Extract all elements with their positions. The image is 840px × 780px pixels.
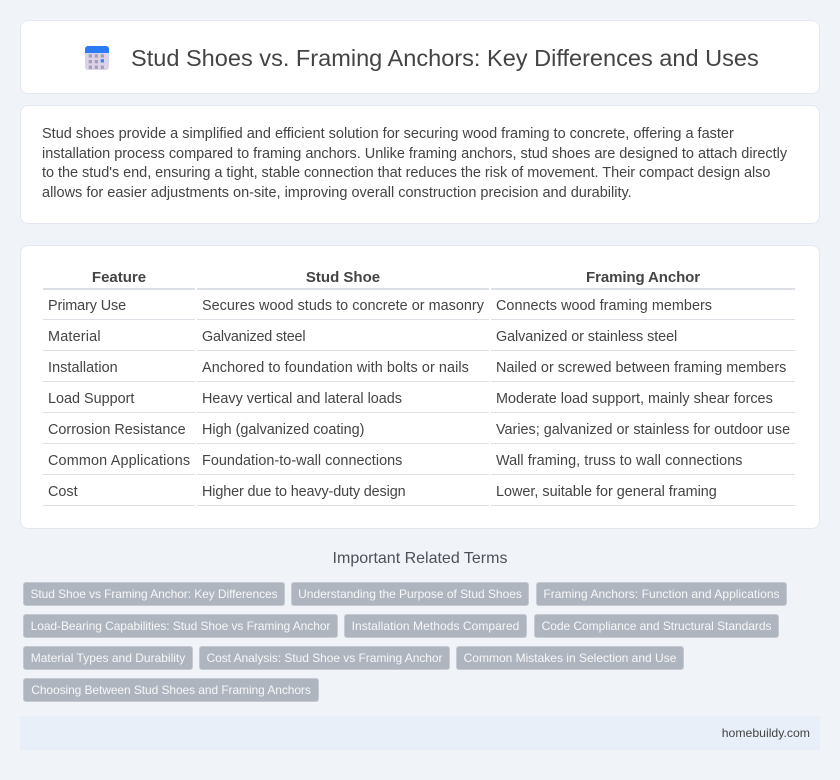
header panel (20, 20, 820, 94)
table header: Feature (92, 269, 146, 286)
title: Stud Shoes vs. Framing Anchors: Key Differences and Uses (131, 45, 759, 71)
row: primary use: Connects wood framing members (496, 298, 712, 314)
row: installation: Anchored to foundation with bolts or nails (202, 360, 469, 376)
row: material (48, 329, 677, 345)
text: summary: installation process compared to framing anchors. Unlike framing anchors, stud shoes are designed to attach directly (42, 146, 787, 162)
tag list: Cost Analysis: Stud Shoe vs Framing Anchor (206, 651, 442, 665)
row: installation: Nailed or screwed between framing members (496, 360, 786, 376)
row: load support (48, 391, 773, 407)
row: corrosion resistance: Varies; galvanized or stainless for outdoor use (496, 422, 790, 438)
row: cost: Cost (48, 484, 78, 500)
row: load support: Load Support (48, 391, 134, 407)
row: common applications: Wall framing, truss to wall connections (496, 453, 743, 469)
table header (92, 269, 700, 286)
panel: summary paragraph (20, 105, 820, 224)
row: common applications: Common Applications (48, 453, 190, 469)
row: primary use: Primary Use (48, 298, 126, 314)
tag list: Load-Bearing Capabilities: Stud Shoe vs Framing Anchor (31, 619, 330, 633)
row: corrosion resistance (48, 422, 790, 438)
row: primary use (48, 298, 712, 314)
tag list: Material Types and Durability (31, 651, 185, 665)
text: summary: allows for easier adjustments on-site, improving overall construction precision and durability. (42, 185, 632, 201)
row: primary use: Secures wood studs to concrete or masonry (202, 298, 484, 314)
tag list: Choosing Between Stud Shoes and Framing Anchors (31, 683, 311, 697)
footer text: homebuildy.com (722, 726, 810, 740)
row: cost: Higher due to heavy-duty design (202, 484, 405, 500)
heading: related terms: Important Related Terms (333, 550, 507, 567)
panel: comparison table (20, 245, 820, 529)
icon: calendar (85, 46, 109, 70)
text: summary: to the stud's end, ensuring a tight, stable connection that reduces the risk of movement. Their compact design also (42, 165, 770, 181)
row: common applications: Foundation-to-wall connections (202, 453, 402, 469)
text: summary (42, 126, 788, 201)
tag list: Code Compliance and Structural Standards (542, 619, 771, 633)
tag list: Understanding the Purpose of Stud Shoes (298, 587, 522, 601)
row: material: Galvanized or stainless steel (496, 329, 677, 345)
row: material: Galvanized steel (202, 329, 305, 345)
row: load support: Heavy vertical and lateral loads (202, 391, 402, 407)
text: summary: Stud shoes provide a simplified and efficient solution for securing wood framing to concrete, offering a faster (42, 126, 734, 142)
row: corrosion resistance: Corrosion Resistance (48, 422, 186, 438)
row: installation: Installation (48, 360, 118, 376)
row: cost (48, 484, 717, 500)
row: common applications (48, 453, 743, 469)
tag list (23, 582, 787, 702)
table header: Framing Anchor (586, 269, 700, 286)
tag list: Stud Shoe vs Framing Anchor: Key Differences (30, 587, 278, 601)
row: load support: Moderate load support, mainly shear forces (496, 391, 773, 407)
row: material: Material (48, 329, 101, 345)
footer bar (20, 716, 820, 750)
comparison table (43, 269, 795, 506)
row: cost: Lower, suitable for general framing (496, 484, 717, 500)
row: corrosion resistance: High (galvanized coating) (202, 422, 364, 438)
row: installation (48, 360, 786, 376)
tag list: Common Mistakes in Selection and Use (464, 651, 676, 665)
tag list: Framing Anchors: Function and Applications (543, 587, 780, 601)
tag list: Installation Methods Compared (352, 619, 519, 633)
table header: Stud Shoe (306, 269, 380, 286)
